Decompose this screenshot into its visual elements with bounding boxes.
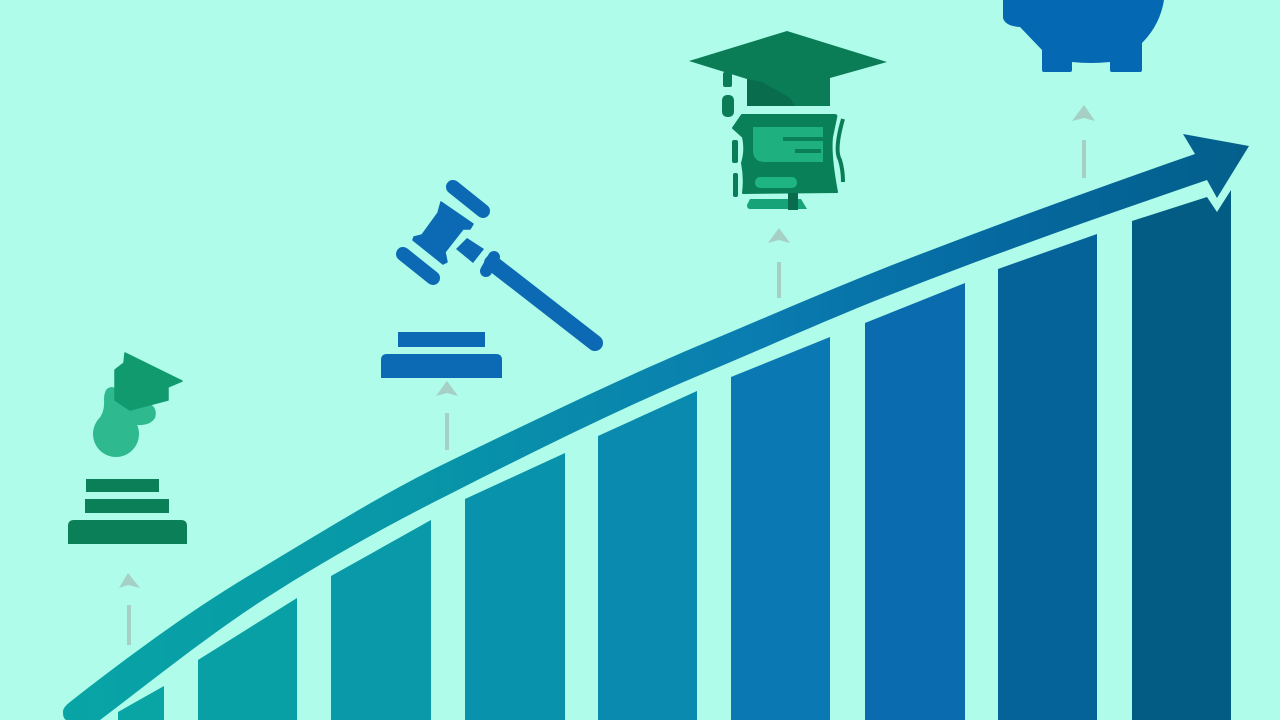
- cap: [689, 31, 887, 106]
- figure cap: [115, 353, 182, 410]
- book stand: [747, 199, 807, 209]
- gavel neck block: [456, 238, 484, 263]
- step three: [68, 520, 187, 544]
- gavel handle: [492, 263, 595, 343]
- arrow: up 2: [436, 381, 458, 450]
- book lines: [783, 137, 823, 141]
- icon: graduation cap with book: [689, 31, 887, 210]
- right squiggle: [838, 119, 843, 182]
- figure head: [93, 411, 139, 457]
- book panel: [753, 127, 823, 162]
- arrow: up 1: [119, 573, 140, 645]
- figure body: [98, 387, 156, 440]
- tassel: [723, 72, 732, 87]
- gavel top bar: [453, 187, 483, 211]
- gavel base top: [398, 332, 485, 347]
- bar chart: [118, 190, 1231, 720]
- icon: graduate on steps: [68, 353, 187, 544]
- arrow: up 4: [1072, 105, 1095, 178]
- growth arrow: [63, 134, 1249, 720]
- gavel base bottom: [381, 354, 502, 378]
- step one: [86, 479, 159, 492]
- book: [733, 115, 837, 193]
- gavel collar: [486, 257, 494, 271]
- icon: gavel on block: [381, 187, 595, 378]
- step two: [85, 499, 169, 513]
- icon: piggy bank: [1003, 0, 1164, 72]
- gavel bottom bar: [403, 254, 433, 278]
- book label: [755, 177, 797, 188]
- gavel head: [413, 202, 473, 264]
- cap shadow: [747, 79, 795, 106]
- left dashes: [732, 140, 738, 163]
- arrow: up 3: [768, 228, 790, 298]
